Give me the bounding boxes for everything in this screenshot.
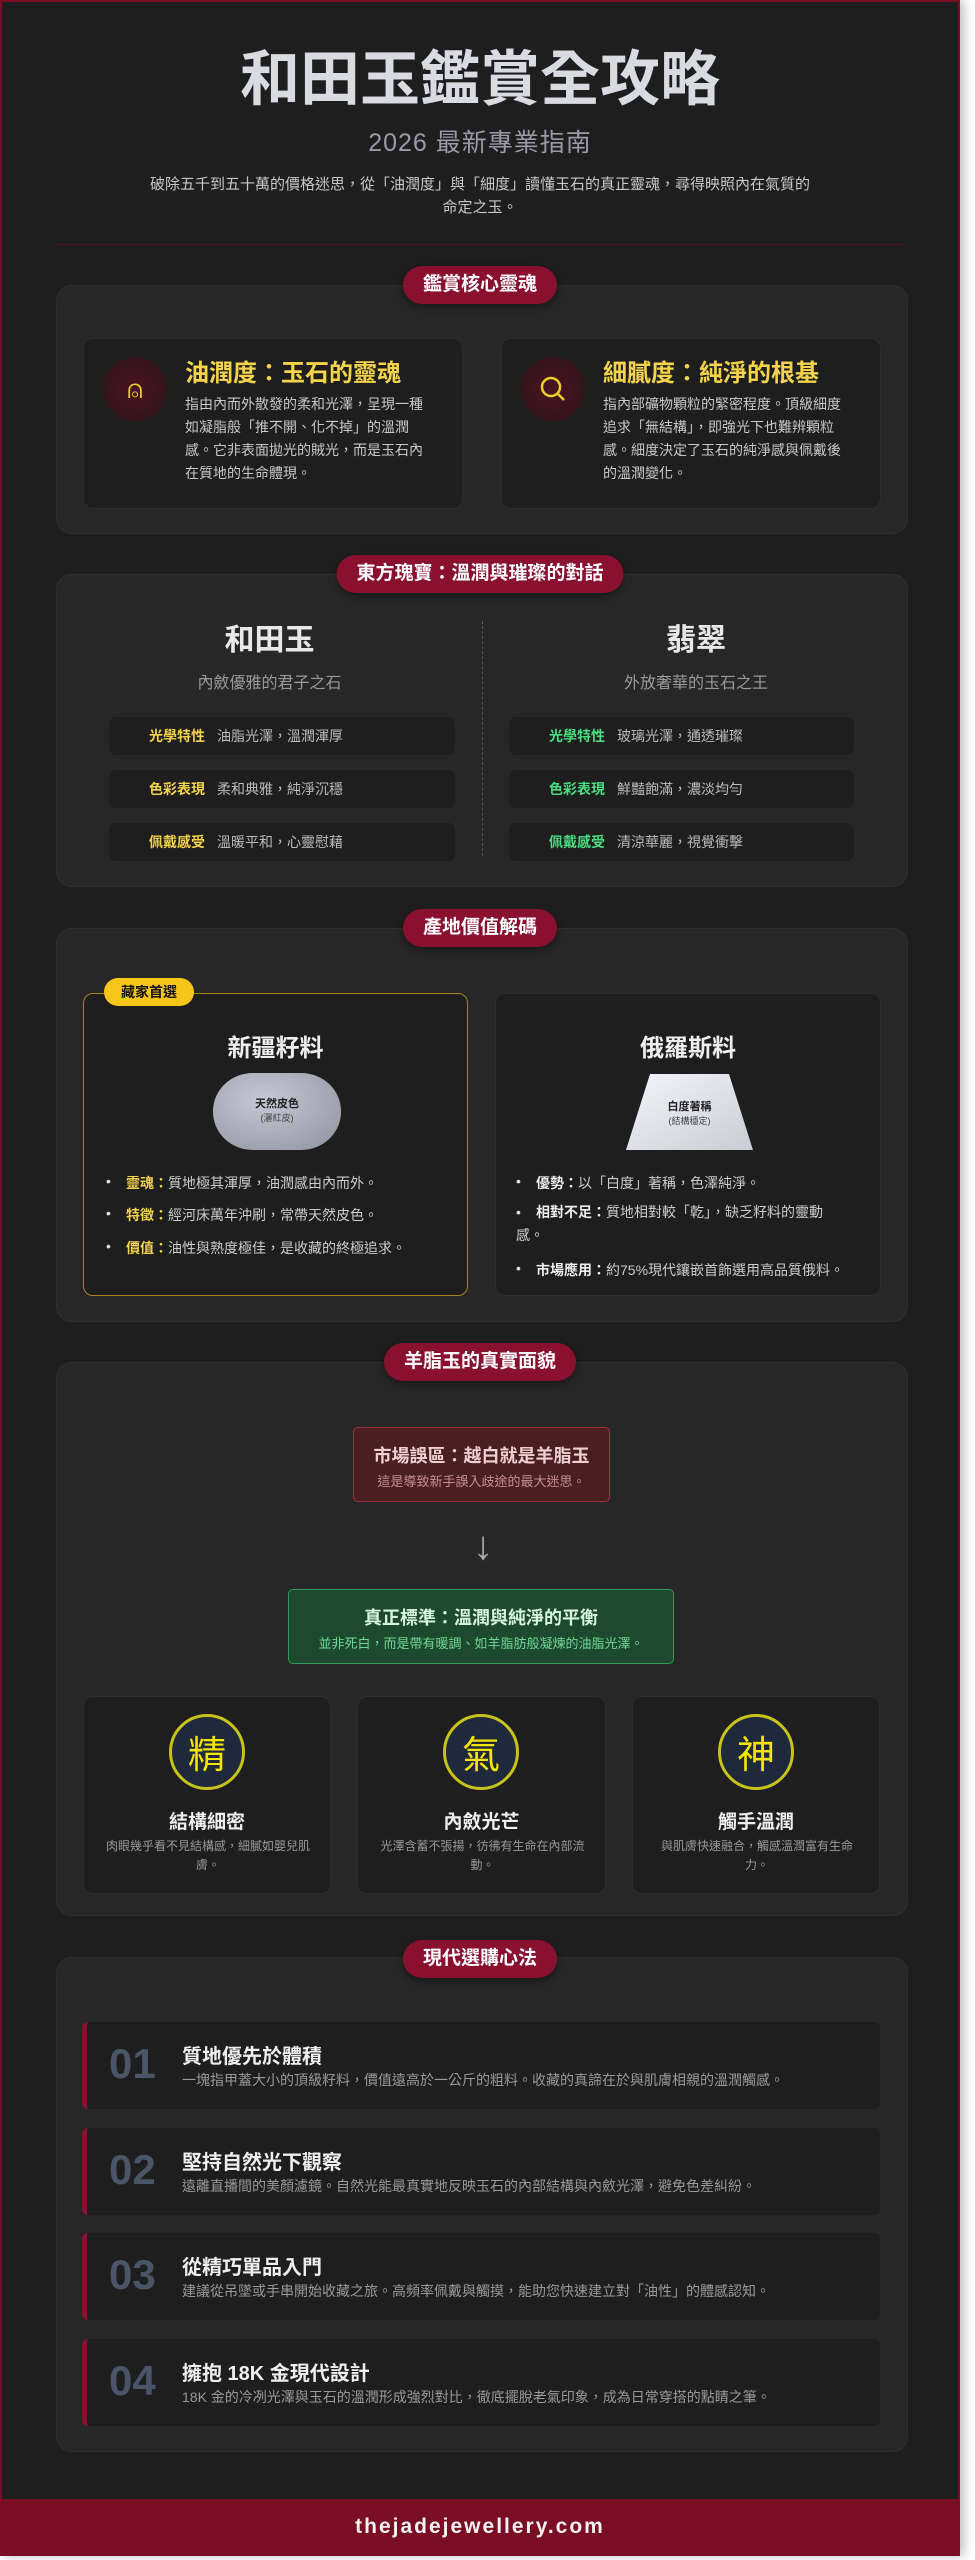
tip 01: 一塊指甲蓋大小的頂級籽料，價值遠高於一公斤的粗料。收藏的真諦在於與肌膚相親的溫潤觸感。 (182, 2072, 784, 2088)
card: russia (495, 993, 881, 1296)
tip 02 (82, 2128, 880, 2215)
footer: thejadejewellery.com (355, 2515, 605, 2538)
tip 04: 04 (109, 2357, 156, 2404)
card: xinjiang: 價值：油性與熟度極佳，是收藏的終極追求。 (126, 1240, 406, 1256)
panel: core soul (56, 285, 908, 534)
tip 02: 02 (109, 2146, 156, 2193)
panel: comparison: 色彩表現 柔和典雅，純淨沉穩 (149, 781, 343, 797)
badge: 藏家首選 (121, 984, 177, 1000)
panel: comparison (56, 574, 908, 887)
heading pill: origin: 產地價值解碼 (423, 917, 537, 938)
tip 04 (82, 2339, 880, 2426)
tip 04: 18K 金的冷冽光澤與玉石的溫潤形成強烈對比，徹底擺脫老氣印象，成為日常穿搭的點睛之筆。 (182, 2389, 771, 2405)
heading pill: comparison (336, 555, 624, 593)
arrow: ↓ (473, 1524, 493, 1568)
heading pill: buying tips (403, 1940, 557, 1978)
column: hetian: 內斂優雅的君子之石 (197, 675, 342, 692)
icon: pebble (213, 1073, 341, 1150)
card: russia: 相對不足：質地相對較「乾」，缺乏籽料的靈動感。 (516, 1204, 823, 1243)
subtitle: 2026 最新專業指南 (368, 129, 592, 157)
card: luster: 光澤含蓄不張揚，彷彿有生命在內部流動。 (380, 1839, 584, 1872)
tip 02: 遠離直播間的美顏濾鏡。自然光能最真實地反映玉石的內部結構與內斂光澤，避免色差糾紛。 (182, 2178, 756, 2194)
card title: 油潤度：玉石的靈魂 (185, 360, 401, 387)
icon: trapezoid: 白度著稱 (668, 1101, 712, 1113)
card: structure (83, 1696, 331, 1894)
rows: hetian (109, 717, 455, 755)
column: jadeite: 外放奢華的玉石之王 (624, 675, 768, 692)
panel: comparison: 佩戴感受 清涼華麗，視覺衝擊 (549, 834, 743, 850)
panel: comparison: 色彩表現 鮮豔飽滿，濃淡均勻 (549, 781, 743, 797)
callout: truth: 並非死白，而是帶有暖調、如羊脂肪般凝煉的油脂光澤。 (318, 1636, 644, 1651)
heading pill: mutton fat (384, 1343, 576, 1381)
panel: buying tips (56, 1957, 908, 2452)
card: structure: 肉眼幾乎看不見結構感，細膩如嬰兒肌膚。 (106, 1839, 310, 1872)
panel: mutton fat (56, 1362, 908, 1916)
heading pill: buying tips: 現代選購心法 (423, 1948, 537, 1969)
callout: myth: 這是導致新手誤入歧途的最大迷思。 (377, 1474, 586, 1489)
tip 03: 建議從吊墜或手串開始收藏之旅。高頻率佩戴與觸摸，能助您快速建立對「油性」的體感認知。 (182, 2283, 770, 2299)
card: russia: 市場應用：約75%現代鑲嵌首飾選用高品質俄料。 (536, 1262, 844, 1278)
card: xinjiang: 特徵：經河床萬年沖刷，常帶天然皮色。 (126, 1207, 378, 1223)
column: jadeite: 翡翠 (666, 624, 726, 657)
callout: myth: 市場誤區：越白就是羊脂玉 (374, 1446, 590, 1466)
tip 01 (82, 2022, 880, 2109)
heading pill: origin (403, 909, 557, 947)
icon: oil (103, 357, 167, 421)
card: russia: 俄羅斯料 (640, 1035, 736, 1062)
tip 01: 質地優先於體積 (182, 2046, 322, 2068)
column: hetian: 和田玉 (224, 624, 314, 657)
intro text (150, 176, 810, 216)
card: luster: 內斂光芒 (443, 1812, 520, 1833)
callout: truth (288, 1589, 674, 1664)
intro text: 命定之玉。 (442, 199, 518, 216)
icon: oil: ⍝ (127, 374, 143, 404)
heading pill: core soul (403, 266, 557, 304)
card: structure: 精 (188, 1724, 226, 1779)
bullets: 靈魂：質地極其渾厚，油潤感由內而外。 (126, 1175, 378, 1191)
heading pill: core soul: 鑑賞核心靈魂 (423, 274, 537, 295)
card title: 細膩度：純淨的根基 (603, 360, 819, 387)
tip 01: 01 (109, 2040, 156, 2087)
icon: pebble: 天然皮色 (255, 1098, 299, 1110)
column: hetian (197, 624, 342, 692)
heading pill: mutton fat: 羊脂玉的真實面貌 (404, 1351, 556, 1372)
tip 03: 從精巧單品入門 (182, 2257, 322, 2279)
card text: 指內部礦物顆粒的緊密程度。頂級細度追求「無結構」，即強光下也難辨顆粒感。細度決定了玉石的純淨感與佩戴後的溫潤變化。 (603, 396, 841, 481)
card: luster: 氣 (462, 1724, 500, 1779)
card text: 指由內而外散發的柔和光澤，呈現一種如凝脂般「推不開、化不掉」的溫潤感。它非表面拋光的賊光，而是玉石內在質地的生命體現。 (185, 396, 423, 481)
rows: jadeite: 光學特性 玻璃光澤，通透璀璨 (549, 728, 743, 744)
column: jadeite (624, 624, 768, 692)
panel: comparison: 佩戴感受 溫暖平和，心靈慰藉 (149, 834, 343, 850)
card: oiliness (83, 338, 463, 509)
tip 03 (82, 2233, 880, 2320)
panel: origin (56, 928, 908, 1322)
heading pill: comparison: 東方瑰寶：溫潤與璀璨的對話 (356, 563, 604, 584)
card: touch: 與肌膚快速融合，觸感溫潤富有生命力。 (661, 1839, 853, 1872)
card: touch (632, 1696, 880, 1894)
rows: jadeite (509, 717, 854, 755)
card: luster (357, 1696, 606, 1894)
card: xinjiang (83, 993, 468, 1296)
card: touch: 神 (737, 1724, 775, 1779)
intro text: 破除五千到五十萬的價格迷思，從「油潤度」與「細度」讀懂玉石的真正靈魂，尋得映照內在氣質的 (150, 176, 810, 193)
icon: trapezoid: (結構穩定) (668, 1116, 710, 1126)
badge (104, 978, 194, 1006)
rows: hetian: 光學特性 油脂光澤，溫潤渾厚 (149, 728, 343, 744)
card: structure: 結構細密 (169, 1812, 245, 1833)
tip 03: 03 (109, 2251, 156, 2298)
callout: truth: 真正標準：溫潤與純淨的平衡 (364, 1608, 598, 1628)
icon: pebble: (灑紅皮) (260, 1113, 294, 1123)
icon: trapezoid (626, 1074, 753, 1150)
bullets: 優勢：以「白度」著稱，色澤純淨。 (536, 1175, 760, 1191)
tip 04: 擁抱 18K 金現代設計 (182, 2363, 370, 2385)
card: xinjiang: 新疆籽料 (228, 1035, 324, 1062)
callout: myth (353, 1427, 610, 1502)
tip 02: 堅持自然光下觀察 (182, 2152, 342, 2174)
card: fineness (501, 338, 881, 509)
icon: magnifier (521, 357, 585, 421)
footer (2, 2499, 958, 2554)
card: touch: 觸手溫潤 (718, 1812, 794, 1833)
title: 和田玉鑑賞全攻略 (240, 46, 720, 113)
